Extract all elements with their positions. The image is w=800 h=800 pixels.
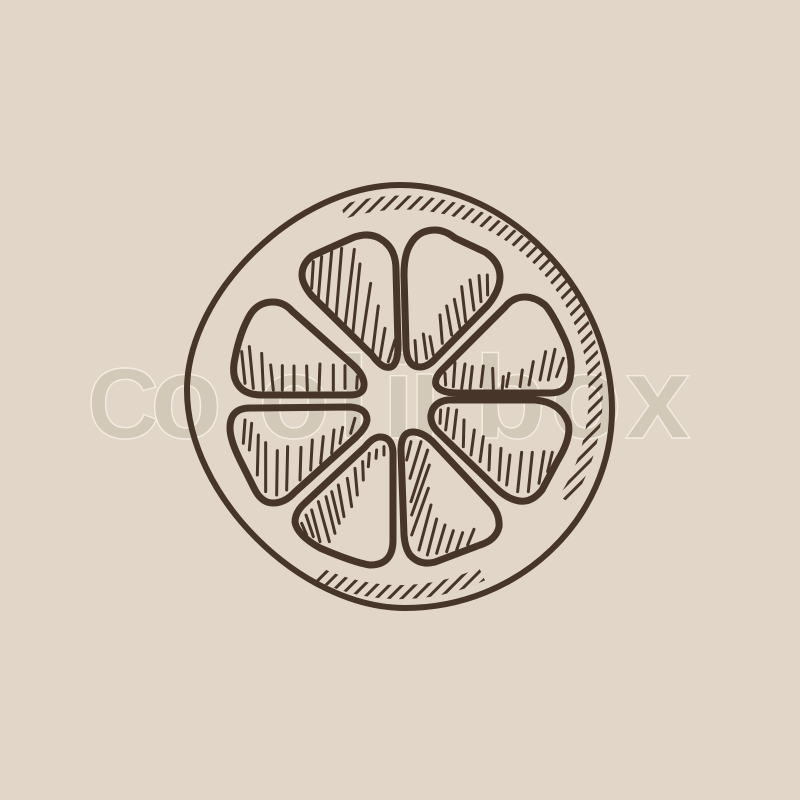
watermark: o	[150, 332, 222, 464]
segment: left lower	[230, 407, 367, 503]
segment: lower left	[295, 437, 393, 565]
segment: right upper	[436, 297, 571, 393]
segment: upper right	[404, 230, 500, 367]
segment: upper left	[302, 235, 398, 367]
watermark: b	[474, 332, 546, 464]
segment: lower right	[401, 432, 499, 563]
fruit rind outline	[187, 185, 612, 608]
watermark	[87, 332, 691, 464]
segment: left upper	[234, 302, 364, 395]
watermark: x	[625, 332, 691, 464]
watermark: o	[550, 332, 622, 464]
watermark: i	[382, 332, 415, 464]
watermark: o	[258, 332, 330, 464]
watermark: l	[337, 332, 370, 464]
watermark: C	[87, 348, 159, 460]
segment: right lower	[431, 400, 569, 501]
rind hatching	[318, 203, 596, 592]
